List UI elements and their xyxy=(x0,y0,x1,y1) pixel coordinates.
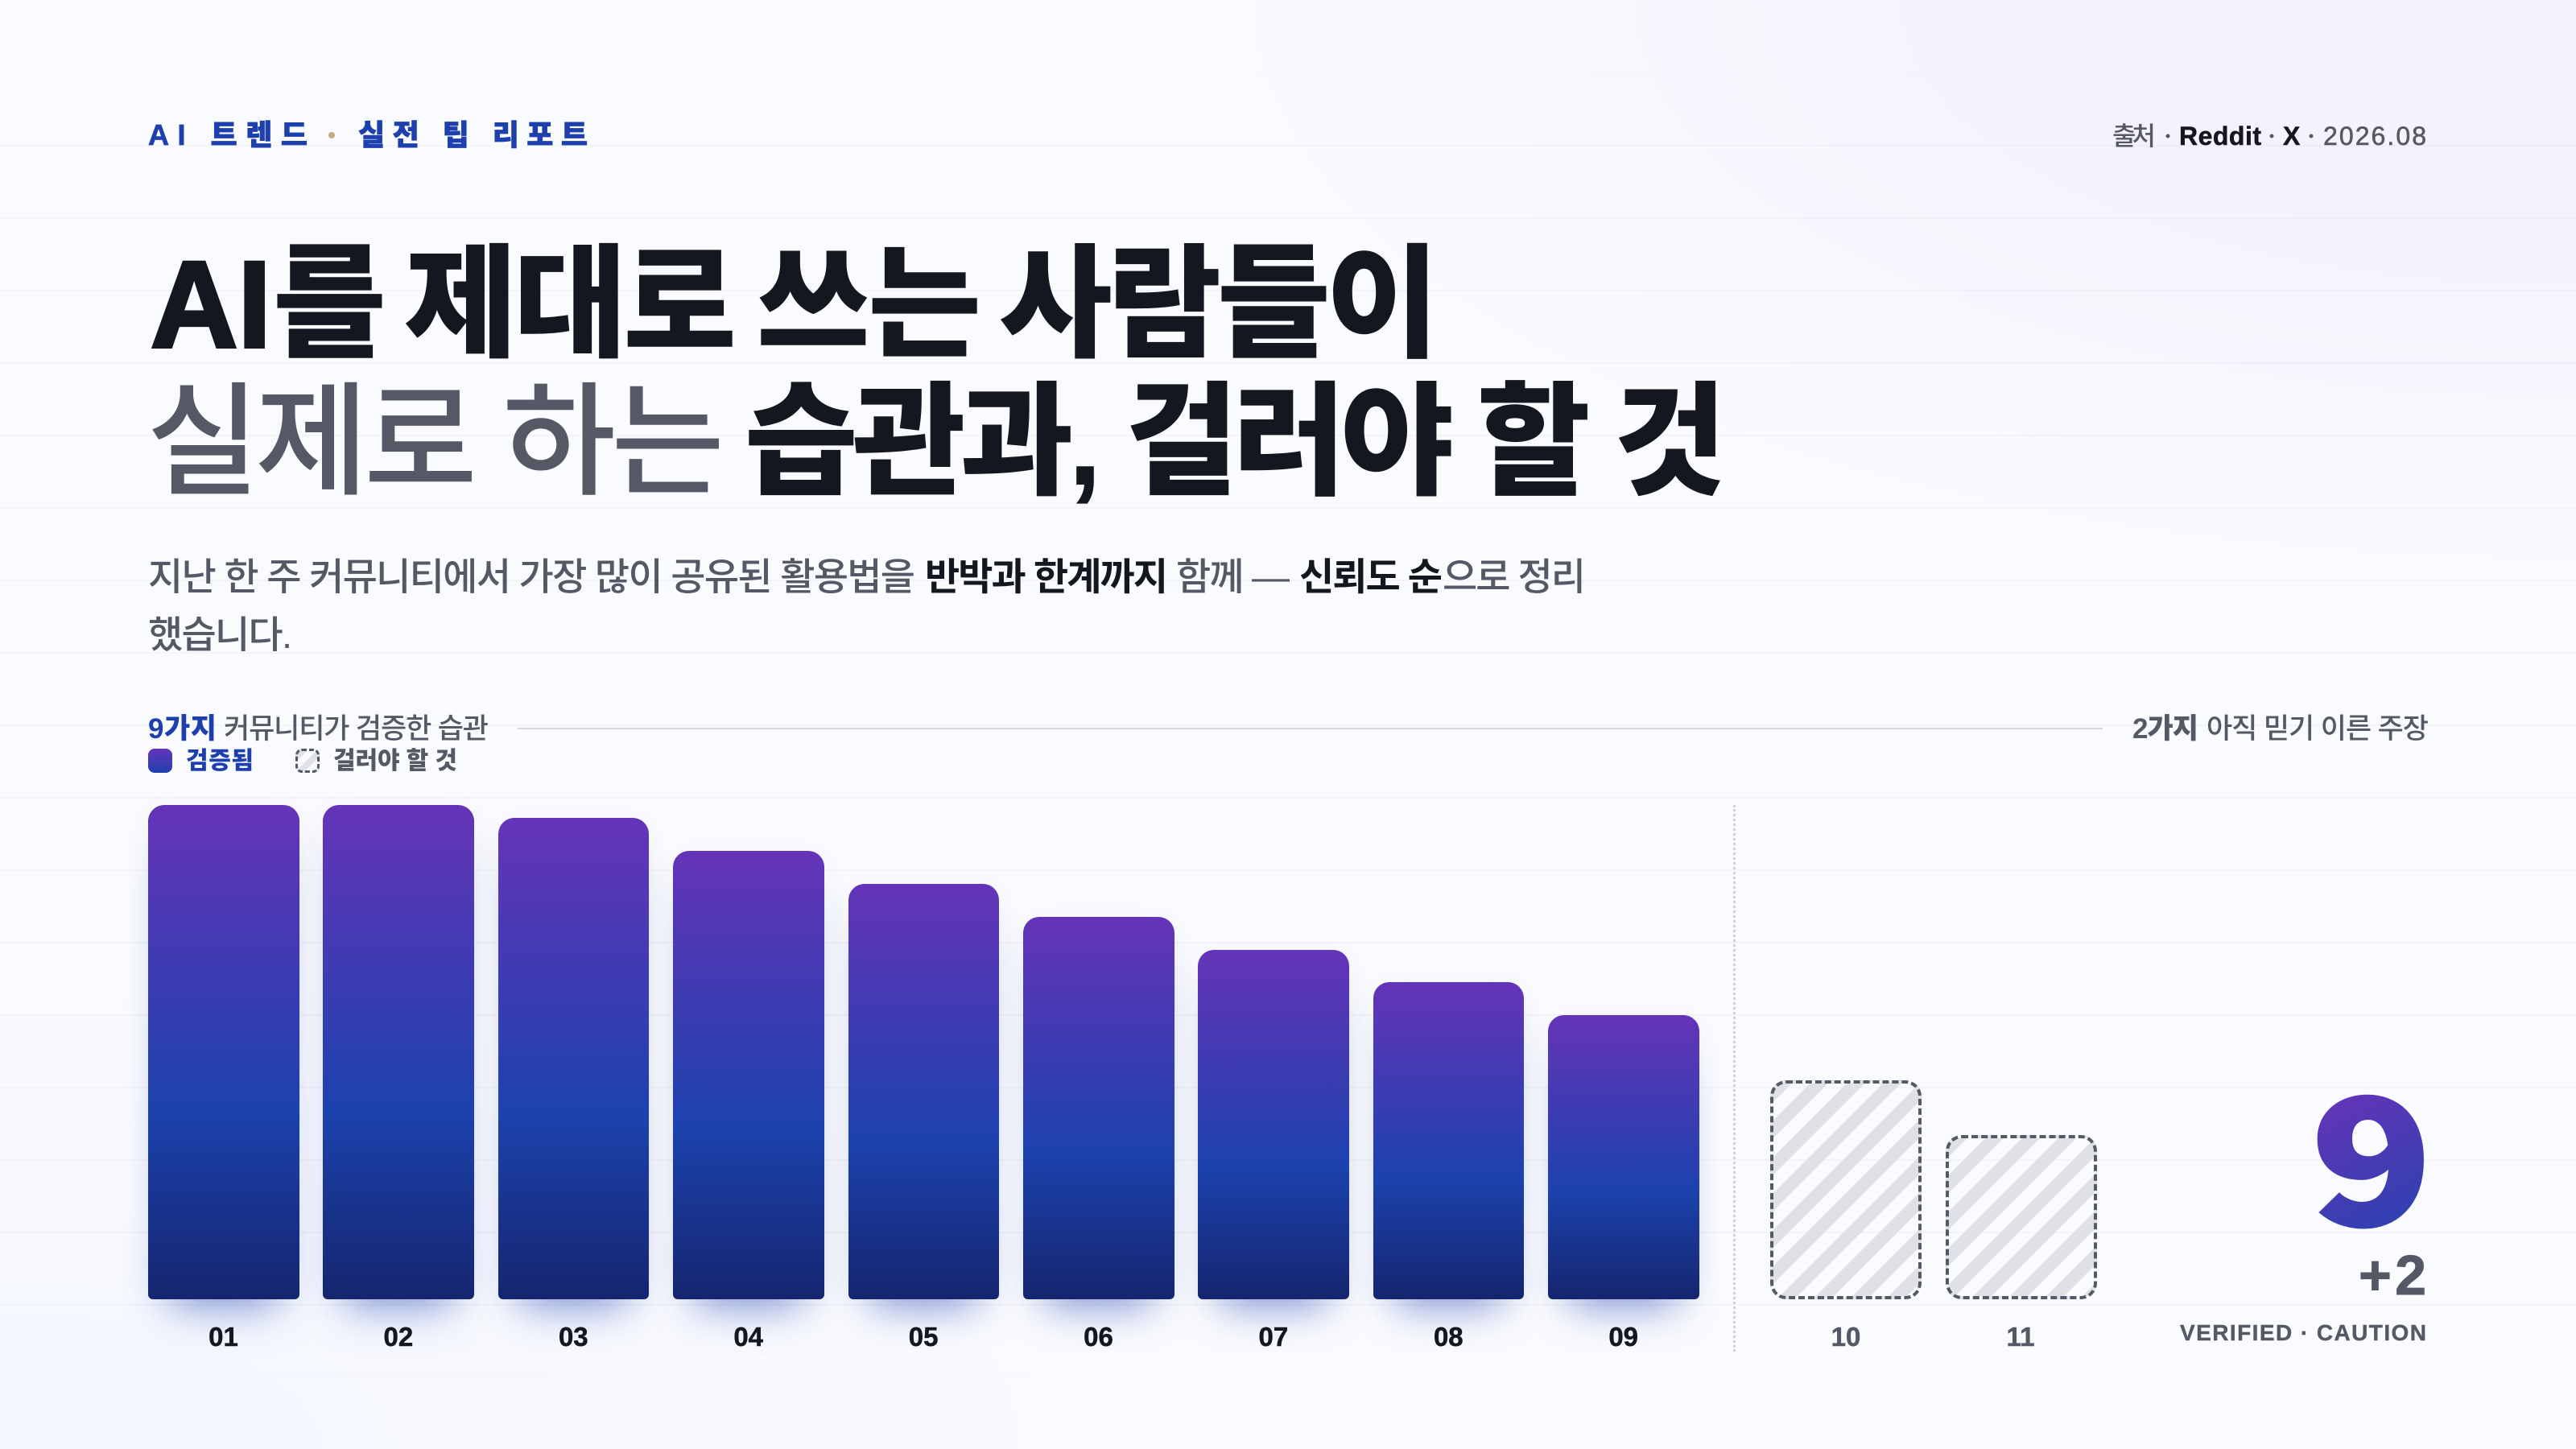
eyebrow: 실전 팁 리포트 xyxy=(358,118,588,151)
title: 습관과, 걸러야 할 것 xyxy=(745,374,1727,511)
legend labels: 검증됨 xyxy=(186,748,254,774)
subtitle xyxy=(148,555,1586,656)
label 04: 04 xyxy=(733,1322,763,1352)
title: 사람들이 xyxy=(999,236,1439,374)
source line: X xyxy=(2283,122,2301,151)
label 11: 11 xyxy=(2007,1322,2034,1352)
title: 제대로 xyxy=(404,236,737,374)
title xyxy=(147,236,1727,511)
big number 9: 9 xyxy=(2311,1028,2432,1275)
legend swatch: verified xyxy=(148,749,172,773)
label 10: 10 xyxy=(1831,1322,1860,1352)
label 05: 05 xyxy=(909,1322,938,1352)
title: 를 xyxy=(273,236,386,374)
label 07: 07 xyxy=(1259,1322,1288,1352)
label 09: 09 xyxy=(1608,1322,1638,1352)
bar 06 xyxy=(1023,917,1174,1299)
caution bar 11 xyxy=(1945,1135,2096,1299)
section heading left: 커뮤니티가 검증한 습관 xyxy=(224,713,489,745)
title: 실제로 하는 xyxy=(147,374,724,511)
bar 09 xyxy=(1548,1015,1699,1299)
label 01: 01 xyxy=(208,1322,238,1352)
plus two: +2 xyxy=(2359,1244,2426,1307)
bar 03 xyxy=(498,818,649,1299)
bar chart xyxy=(139,805,2097,1352)
bar 04 xyxy=(673,851,824,1299)
section heading right: 아직 믿기 이른 주장 xyxy=(2207,713,2429,745)
source line: 출처 xyxy=(2112,122,2156,151)
subtitle: 신뢰도 순 xyxy=(1299,555,1443,598)
title: AI xyxy=(151,236,271,374)
section heading right: 2가지 xyxy=(2132,713,2198,745)
label 03: 03 xyxy=(559,1322,588,1352)
legend labels xyxy=(186,748,457,774)
label 08: 08 xyxy=(1434,1322,1463,1352)
bar 05 xyxy=(848,884,999,1299)
section rule xyxy=(518,728,2103,729)
subtitle: 지난 한 주 커뮤니티에서 가장 많이 공유된 활용법을 xyxy=(148,555,915,598)
source line: Reddit xyxy=(2179,122,2261,151)
subtitle: 함께 — xyxy=(1176,555,1290,598)
source line: 2026.08 xyxy=(2323,122,2426,151)
legend swatch: caution xyxy=(295,749,320,773)
caution bar 10 xyxy=(1770,1080,1922,1299)
source line xyxy=(2112,122,2426,151)
eyebrow xyxy=(148,118,588,151)
section heading left: 9가지 xyxy=(148,713,217,745)
label 02: 02 xyxy=(384,1322,413,1352)
title: 쓰는 xyxy=(757,236,981,374)
bar 08 xyxy=(1373,982,1524,1299)
bar 01 xyxy=(148,805,299,1299)
eyebrow: AI 트렌드 xyxy=(148,118,308,151)
subtitle: 으로 정리 xyxy=(1443,555,1586,598)
bar 02 xyxy=(323,805,474,1299)
divider between verified and caution xyxy=(1733,805,1736,1352)
bar 07 xyxy=(1198,950,1349,1299)
subtitle: 반박과 한계까지 xyxy=(925,555,1168,598)
subtitle: 했습니다. xyxy=(148,613,292,656)
label 06: 06 xyxy=(1084,1322,1113,1352)
verified caution caption: VERIFIED · CAUTION xyxy=(2180,1320,2426,1345)
legend labels: 걸러야 할 것 xyxy=(333,748,457,774)
